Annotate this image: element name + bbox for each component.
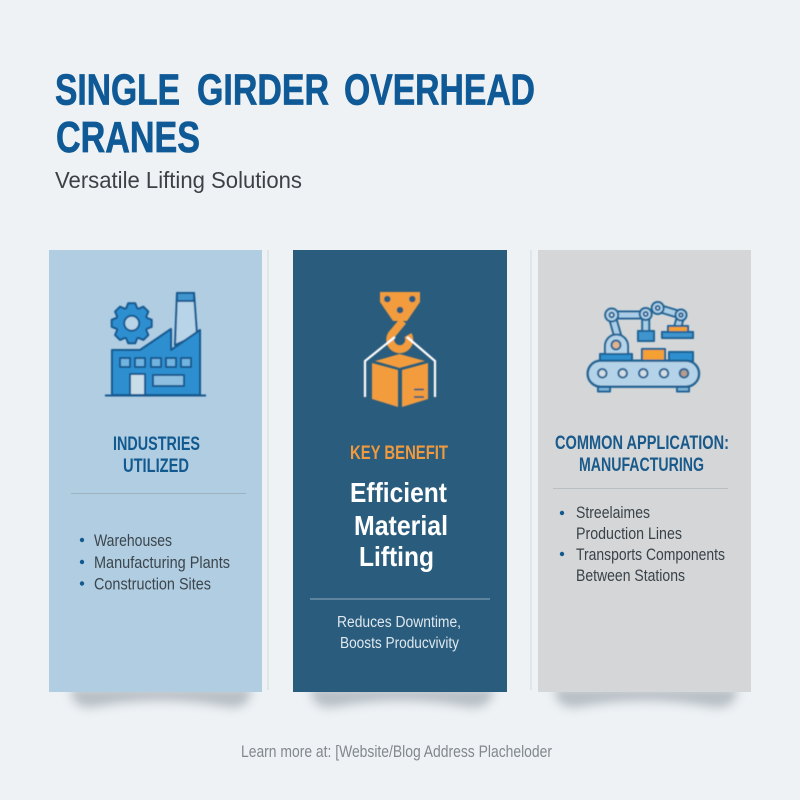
- heading: industries utilized: INDUSTRIES: [113, 434, 200, 455]
- list: manufacturing uses: Between Stations: [576, 566, 685, 585]
- list: manufacturing uses: Transports Components: [576, 545, 725, 564]
- title: GIRDER: [197, 66, 329, 114]
- icon: robotic arms and conveyor: [588, 302, 699, 392]
- footer link: Learn more at: [Website/Blog Address Placheloder: [241, 742, 552, 761]
- icon: crane hook lifting box: [365, 292, 435, 407]
- list: manufacturing uses: Production Lines: [576, 524, 682, 543]
- title: [55, 66, 535, 162]
- heading: common application manufacturing: COMMON APPLICATION:: [555, 433, 729, 454]
- text: benefit details: Reduces Downtime,: [337, 614, 461, 631]
- headline: efficient material lifting: Efficient: [350, 477, 447, 508]
- text: benefit details: [337, 614, 461, 652]
- text: benefit details: Boosts Producvivity: [340, 635, 459, 652]
- panel: common application: [538, 250, 751, 692]
- list: industries: Warehouses: [94, 531, 172, 550]
- headline: efficient material lifting: [350, 477, 448, 572]
- label: key benefit: KEY BENEFIT: [350, 443, 448, 464]
- list: industries: Manufacturing Plants: [94, 553, 230, 572]
- panel: industries utilized: [49, 250, 262, 692]
- heading: common application manufacturing: MANUFACTURING: [579, 455, 704, 476]
- list: manufacturing uses: [560, 503, 725, 585]
- subtitle: Versatile Lifting Solutions: [55, 167, 302, 193]
- icon: factory and gear: [105, 293, 206, 396]
- list: manufacturing uses: Streelaimes: [576, 503, 650, 522]
- list: industries: [80, 531, 230, 594]
- heading: industries utilized: [113, 434, 200, 477]
- headline: efficient material lifting: Material: [354, 510, 448, 541]
- list: industries: Construction Sites: [94, 574, 211, 594]
- heading: common application manufacturing: [555, 433, 729, 476]
- headline: efficient material lifting: Lifting: [359, 541, 434, 572]
- title: OVERHEAD: [344, 66, 535, 114]
- title: CRANES: [56, 114, 200, 162]
- panel: key benefit: [293, 250, 507, 692]
- heading: industries utilized: UTILIZED: [123, 456, 189, 477]
- title: SINGLE: [55, 66, 180, 114]
- card shadows: [70, 688, 738, 708]
